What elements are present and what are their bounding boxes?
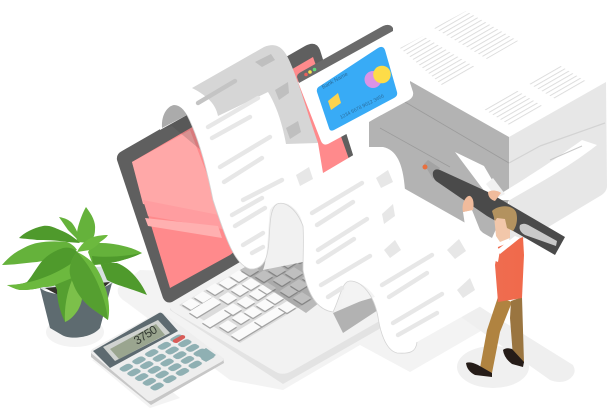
- card number: 1234 5678 9012 3456: [339, 93, 385, 121]
- pot: [40, 283, 112, 338]
- red display: [132, 57, 350, 288]
- large key: [196, 348, 216, 362]
- window buttons: [304, 68, 316, 76]
- right hand: [488, 190, 501, 201]
- keypad: [116, 332, 218, 392]
- inner fold right: [341, 281, 375, 307]
- pen barrel: [433, 169, 565, 255]
- display digits: 3750: [131, 322, 160, 348]
- leaves: [2, 207, 147, 322]
- deck top: [170, 205, 460, 374]
- hair: [492, 206, 517, 231]
- translucent back of receipt: [192, 45, 318, 144]
- window body: [298, 30, 413, 145]
- screen frame: [117, 44, 354, 302]
- receipt body: [160, 46, 497, 353]
- calculator: [91, 312, 224, 405]
- receipt text lines: [198, 81, 442, 335]
- receipt paper: [160, 45, 497, 353]
- deck front lip: [170, 285, 430, 384]
- inner curl: [162, 105, 187, 128]
- vest: [495, 237, 524, 302]
- plant: [2, 207, 147, 338]
- floor shadows: [46, 270, 575, 408]
- pen tip: [422, 164, 428, 170]
- left hand: [463, 196, 474, 212]
- trousers left leg: [480, 297, 512, 373]
- soil: [45, 282, 110, 296]
- display bezel: [103, 320, 170, 361]
- lcd: [110, 324, 165, 359]
- calculator body: [91, 312, 223, 401]
- shadow below fold: [333, 295, 378, 333]
- calculator lip: [91, 352, 224, 405]
- credit card: [317, 47, 397, 131]
- red key: [173, 335, 185, 343]
- pot rim: [37, 266, 113, 290]
- page lines on stack sides: [380, 102, 605, 167]
- printed text blocks: [400, 11, 587, 126]
- chip: [328, 93, 341, 110]
- pen clip: [520, 224, 557, 246]
- person: [463, 190, 524, 377]
- bank name: Bank Name: [321, 72, 349, 91]
- laptop screen: [117, 44, 354, 302]
- inner fold left: [263, 203, 303, 270]
- open book: [455, 140, 597, 200]
- paper stack: [369, 11, 607, 240]
- keyboard well: [179, 230, 369, 343]
- paper shadow on keys: [240, 226, 372, 313]
- laptop deck: [170, 205, 460, 384]
- face and neck: [494, 216, 510, 242]
- stack left face: [369, 81, 509, 238]
- receipt price squares: [255, 54, 475, 298]
- paper edge strokes: [187, 115, 417, 353]
- keys: [183, 252, 320, 341]
- shirt arm and collar: [463, 210, 500, 262]
- window title bar: [297, 25, 393, 83]
- curl shadow: [165, 115, 203, 152]
- screen reflections: [132, 130, 224, 216]
- left shoe: [466, 362, 492, 377]
- trousers right leg: [510, 297, 524, 363]
- stack right face: [509, 82, 607, 240]
- pen: [422, 160, 565, 255]
- right shoe: [503, 348, 524, 367]
- payment window: [297, 25, 413, 145]
- display housing: [93, 313, 178, 368]
- card logo: [364, 71, 382, 88]
- pen end: [424, 160, 440, 179]
